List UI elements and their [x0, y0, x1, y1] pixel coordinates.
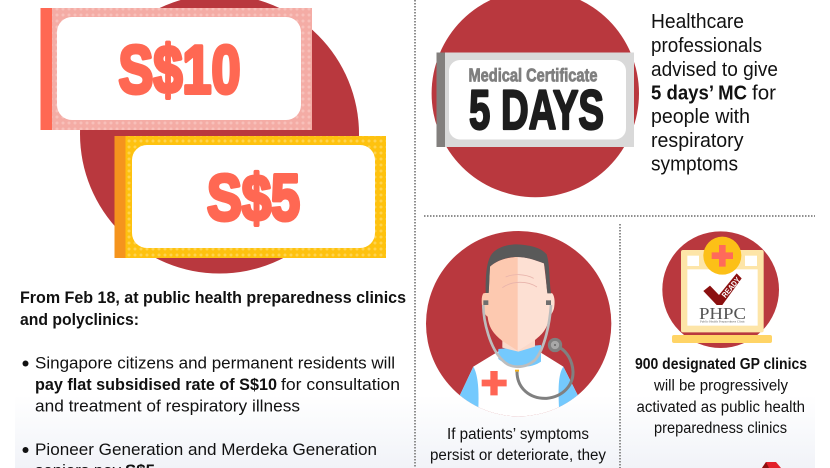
icon: PHPC clinic: Public Health Preparedness Clinic — [700, 320, 746, 324]
bullet: pioneer and merdeka generation: Pioneer Generation and Merdeka Generation — [35, 440, 377, 459]
heading: from Feb 18: and polyclinics: — [20, 310, 139, 329]
text block: symptoms persist — [430, 426, 606, 464]
heading: from Feb 18 — [20, 288, 406, 329]
text block: 5 days MC advice — [651, 11, 778, 176]
panel: medical certificate illustration — [432, 0, 639, 197]
text block: 5 days MC advice: advised to give — [651, 59, 778, 81]
text block: fee details — [20, 288, 406, 468]
text block: 5 days MC advice: professionals — [651, 35, 762, 57]
text block: 5 days MC advice: respiratory — [651, 130, 744, 152]
icon: PHPC clinic: READY — [720, 275, 743, 300]
ticket: S$10: S$10 — [118, 32, 240, 108]
text block: 5 days MC advice: Healthcare — [651, 11, 744, 33]
heading: from Feb 18: From Feb 18, at public health preparedness clinics — [20, 288, 406, 307]
bullet: citizens and residents: pay flat subsidised rate of S$10 — [35, 375, 277, 394]
text block: 900 GP clinics: activated as public health — [636, 399, 805, 416]
bullet: citizens and residents — [22, 354, 400, 416]
icon: PHPC clinic — [662, 231, 779, 348]
text block: symptoms persist: If patients’ symptoms — [447, 426, 589, 443]
text block: 900 GP clinics: will be progressively — [653, 378, 788, 394]
bullet: citizens and residents: for consultation — [281, 375, 400, 394]
text block: 900 GP clinics: 900 designated GP clinics — [635, 356, 807, 373]
label: medical certificate: Medical Certificate — [468, 64, 598, 86]
text block: 5 days MC advice: symptoms — [651, 154, 738, 176]
icon: PHPC clinic: PHPC — [699, 304, 746, 323]
bullet: pioneer and merdeka generation — [22, 440, 377, 468]
ticket: S$10 — [40, 8, 312, 130]
icon: red shape cut off at bottom — [762, 462, 781, 468]
label: 5 days: 5 DAYS — [469, 78, 604, 141]
panel: fee tickets illustration — [40, 0, 386, 274]
text block: 5 days MC advice: people with — [651, 106, 750, 128]
text block: symptoms persist: persist or deteriorate, they — [430, 447, 606, 464]
ticket: S$5 — [114, 136, 386, 258]
text block: 900 GP clinics — [635, 356, 807, 437]
text block: 5 days MC advice: for — [752, 82, 776, 104]
bullet: citizens and residents: and treatment of respiratory illness — [35, 396, 300, 416]
text block: 5 days MC advice: 5 days’ MC — [651, 82, 747, 104]
text block: 900 GP clinics: preparedness clinics — [654, 420, 787, 437]
icon: doctor with stethoscope — [426, 231, 611, 428]
bullet: citizens and residents: Singapore citizens and permanent residents will — [35, 354, 395, 372]
ticket: S$5: S$5 — [207, 161, 300, 234]
